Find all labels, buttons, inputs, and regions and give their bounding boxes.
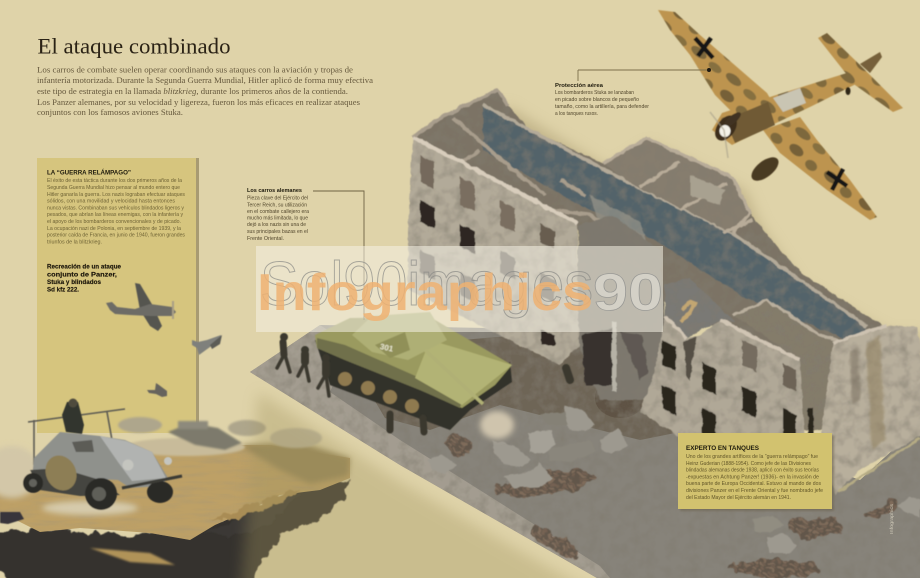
antenna rail xyxy=(28,409,125,465)
sidebar caption: Recreación: Recreación de un ataque xyxy=(47,264,121,270)
propeller xyxy=(710,112,728,158)
callout: Experto en tanques: divisiones Panzer en el Frente Oriental y fue nombrado jefe xyxy=(686,488,823,494)
credit: Infographics xyxy=(889,503,894,534)
callout: Los carros alemanes: Los carros alemanes xyxy=(247,188,302,194)
intro text xyxy=(37,66,373,117)
hull xyxy=(32,432,168,488)
callout: Protección aérea xyxy=(555,83,649,117)
rubble boulders xyxy=(428,405,920,553)
sidebar caption: Recreación xyxy=(47,264,121,294)
spare wheel xyxy=(40,450,82,496)
ground base of the diorama xyxy=(240,325,920,578)
turret xyxy=(352,312,447,360)
gun barrel xyxy=(425,350,483,404)
island: grass and rock base xyxy=(0,442,350,578)
callout: Los carros alemanes: dejó a los nazis sin una de xyxy=(247,222,306,228)
fuselage xyxy=(712,72,860,145)
callout: Los carros alemanes: Tercer Reich, su utilización xyxy=(247,202,307,208)
icon: small plane 3 xyxy=(147,383,167,397)
pipe xyxy=(838,438,920,492)
sidebar text: La guerra relámpago: Hitler ganaría la guerra. Los nazis lograban efectuar ataques xyxy=(47,192,185,198)
muzzle blast xyxy=(480,411,514,439)
title: El ataque combinado xyxy=(38,34,231,58)
dirt patch xyxy=(240,442,350,484)
callout: Protección aérea: a los tanques rusos. xyxy=(555,111,598,117)
rock underside xyxy=(0,478,349,578)
rear right room xyxy=(733,300,840,430)
hull xyxy=(315,317,512,408)
soldiers xyxy=(277,334,570,432)
intro text: Los Panzer alemanes, por su velocidad y ligereza, fueron los más eficaces en realizar ataques xyxy=(37,98,360,107)
brick piles xyxy=(444,433,899,577)
sidebar text: La guerra relámpago: La ocupación nazi de Polonia, en septiembre de 1939, y la xyxy=(47,226,182,232)
watermark: Sol90images xyxy=(260,250,593,319)
leader: German tanks xyxy=(313,191,364,320)
right wall windows xyxy=(662,340,813,436)
tail fin xyxy=(860,52,882,73)
sidebar text: La guerra relámpago: Segunda Guerra Mundial hizo pensar al mundo entero que xyxy=(47,185,180,191)
leader: aerial protection xyxy=(578,70,708,81)
callout: Experto en tanques: EXPERTO EN TANQUES xyxy=(686,445,760,452)
ruined building xyxy=(408,90,920,495)
interior floor and rooms xyxy=(413,90,884,360)
upper wing xyxy=(658,10,778,115)
callout: Protección aérea: Protección aérea xyxy=(555,83,604,89)
rubble in the room with tan soldier xyxy=(665,278,735,338)
building shadow xyxy=(500,105,920,420)
stuka bomber xyxy=(658,10,903,220)
callout: Protección aérea: en picado sobre blancos de pequeño xyxy=(555,97,639,103)
sidebar text: La guerra relámpago: triunfos de la blitzkrieg. xyxy=(47,240,102,246)
callout: Experto en tanques: -expuestas en Achtung Panzer! (1936)- en la invasión de xyxy=(686,474,819,480)
callout: Experto en tanques: Uno de los grandes artífices de la “guerra relámpago” fue xyxy=(686,454,818,460)
left rooms rims xyxy=(413,90,620,232)
front left wall xyxy=(408,137,579,365)
sidebar text: La guerra relámpago: El éxito de esta táctica durante los dos primeros años de la xyxy=(47,178,183,184)
back wall with blue paint xyxy=(483,105,867,345)
rear rooms xyxy=(603,138,750,233)
wheels xyxy=(23,473,43,493)
callout: Los carros alemanes: mucho más limitada, lo que xyxy=(247,216,308,222)
callout: Experto en tanques: buena parte de Europa Occidental. Estuvo al mando de dos xyxy=(686,481,821,487)
sidebar caption: Recreación: Sd kfz 222. xyxy=(47,286,79,294)
back wall top rim xyxy=(483,105,867,327)
callout: Protección aérea: tamaño, como la artillería, para defender xyxy=(555,104,649,110)
callout: Los carros alemanes xyxy=(247,188,309,242)
callout: Protección aérea: Los bombarderos Stuka se lanzaban xyxy=(555,90,634,96)
dust xyxy=(0,446,40,498)
sidebar text: La guerra relámpago: el apoyo de los bombarderos convencionales y de picado. xyxy=(47,219,181,225)
lower wing xyxy=(763,117,877,220)
dark debris ground xyxy=(345,330,680,440)
tracks xyxy=(315,340,512,430)
hull number: 301 xyxy=(379,342,395,354)
sidebar text: La guerra relámpago: LA “GUERRA RELÁMPAGO” xyxy=(47,168,131,176)
callout: Los carros alemanes: en el combate callejero era xyxy=(247,209,309,215)
icon: small plane 2 xyxy=(192,335,222,355)
intro text: Los carros de combate suelen operar coordinando sus ataques con la aviación y tropas de xyxy=(37,66,353,74)
watermark: Infographics xyxy=(257,264,593,322)
canopy xyxy=(773,88,806,112)
tail wheel xyxy=(846,87,850,95)
tank xyxy=(315,312,512,430)
stairs xyxy=(620,332,648,380)
sidebar text: La guerra relámpago: sólidos, con una movilidad y velocidad hasta entonces xyxy=(47,198,175,204)
callout: Experto en tanques: del Estado Mayor del Ejército alemán en 1941. xyxy=(686,495,791,501)
bomb xyxy=(747,153,783,185)
left wall windows xyxy=(420,156,555,345)
intro text: infantería motorizada. Durante la Segunda Guerra Mundial, Hitler aplicó de forma muy efectiva xyxy=(37,76,373,85)
front right wall xyxy=(640,317,805,436)
panel: sidebar background xyxy=(37,158,199,433)
tailplane xyxy=(818,33,903,112)
soldier xyxy=(62,402,84,434)
kerb xyxy=(250,325,610,578)
grass surface xyxy=(0,445,350,540)
engine xyxy=(711,111,741,145)
callout: Experto en tanques xyxy=(678,433,834,511)
sidebar text: La guerra relámpago: posterior caída de Francia, en junio de 1940, fueron grandes xyxy=(47,232,185,238)
callout: Los carros alemanes: Frente Oriental. xyxy=(247,236,284,242)
armoured car Sd Kfz 222 xyxy=(0,398,182,515)
sidebar text: La guerra relámpago: nunca vistas. Combinaban sus vehículos blindados ligeros y xyxy=(47,206,184,212)
intro text: conjuntos con los famosos aviones Stuka. xyxy=(37,108,183,117)
sidebar text: La guerra relámpago: pesados, que abrían las líneas enemigas, con la infantería y xyxy=(47,212,183,218)
watermark: 90 xyxy=(593,264,663,322)
leader dot on wing xyxy=(707,68,711,72)
dark rock patches xyxy=(205,495,298,538)
corner pier xyxy=(820,325,920,495)
crosses xyxy=(695,38,713,58)
callout: Los carros alemanes: Pieza clave del Ejército del xyxy=(247,196,308,202)
grass drips over the rock xyxy=(90,548,175,565)
sidebar caption: Recreación: Stuka y blindados xyxy=(47,279,101,286)
callout: Experto en tanques: blindadas alemanas desde 1938, aplicó con éxito sus teorías xyxy=(686,468,819,474)
callout: Experto en tanques: Heinz Guderian (1888-1954). Como jefe de las Divisiones xyxy=(686,461,811,467)
interior centre xyxy=(578,215,665,400)
intro text: este tipo de estrategia en la llamada blitzkrieg, durante los primeros años de la contienda. xyxy=(37,87,348,96)
sidebar text: La guerra relámpago xyxy=(47,168,185,246)
sidebar caption: Recreación: conjunto de Panzer, xyxy=(47,272,117,278)
headlight xyxy=(122,460,134,470)
icon: small plane 1 xyxy=(106,283,176,331)
tanks and dust on the horizon xyxy=(118,417,322,456)
callout: Los carros alemanes: sus principales bazas en el xyxy=(247,229,308,235)
